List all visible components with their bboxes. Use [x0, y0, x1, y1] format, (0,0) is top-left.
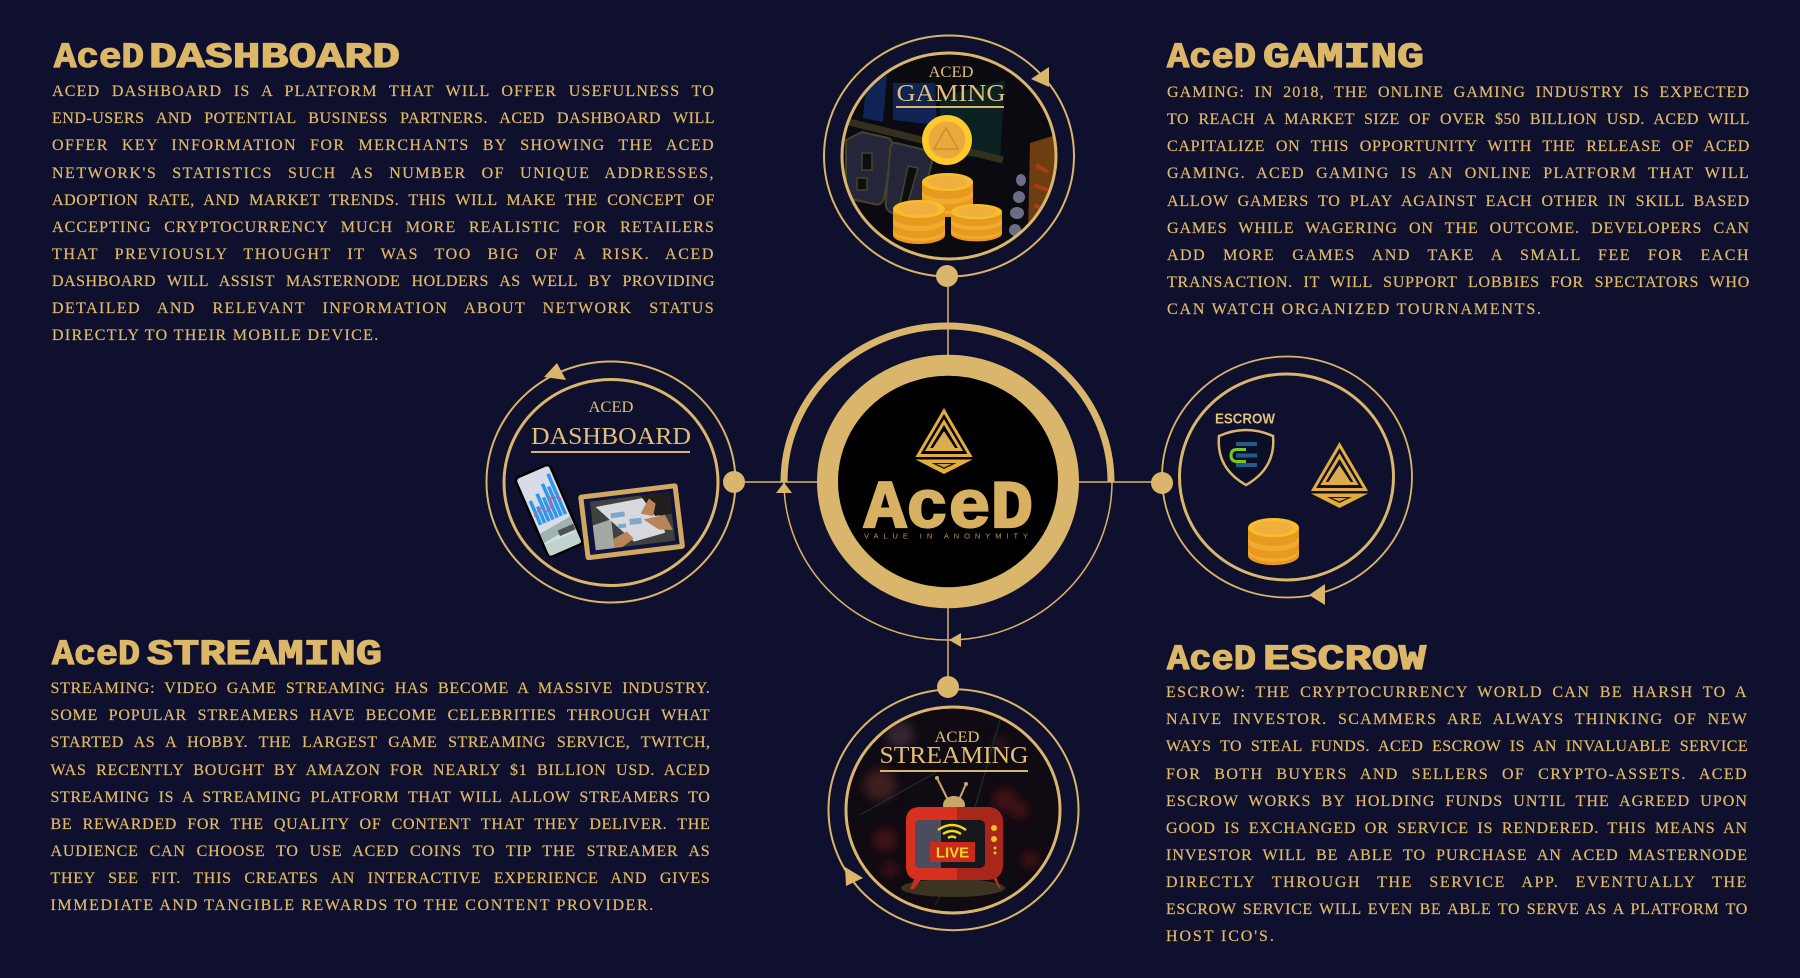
text block: Aced Gaming: ADD MORE GAMES AND TAKE A SMALL FEE FOR EACH [1167, 247, 1750, 264]
title: AceD Streaming heading: STREAMING [147, 635, 382, 675]
title: AceD Gaming heading: GAMING [1263, 38, 1424, 78]
text block: Aced Dashboard: DIRECTLY TO THEIR MOBILE DEVICE. [52, 327, 380, 344]
text block: Aced Gaming: GAMING. ACED GAMING IS AN ONLINE PLATFORM THAT WILL [1167, 165, 1750, 182]
text block: Aced Gaming: GAMING: IN 2018, THE ONLINE GAMING INDUSTRY IS EXPECTED [1167, 84, 1750, 101]
node dot [1151, 472, 1173, 494]
title: AceD Dashboard heading: AceD [54, 38, 144, 78]
text block: Aced Gaming: CAN WATCH ORGANIZED TOURNAMENTS. [1167, 301, 1543, 318]
tagline: VALUE IN ANONYMITY [864, 532, 1028, 540]
text block: Aced Dashboard: NETWORK'S STATISTICS SUCH AS NUMBER OF UNIQUE ADDRESSES, [52, 165, 715, 182]
title: AceD Streaming heading: AceD [52, 635, 140, 675]
thin lower arc [784, 482, 1112, 640]
text block: Aced Dashboard: DETAILED AND RELEVANT INFORMATION ABOUT NETWORK STATUS [52, 300, 715, 317]
text block: Aced Gaming: ALLOW GAMERS TO PLAY AGAINST EACH OTHER IN SKILL BASED [1167, 193, 1750, 210]
text block: Aced Escrow: DIRECTLY THROUGH THE SERVICE APP. EVENTUALLY THE [1166, 874, 1748, 891]
node: Aced Streaming [828, 676, 1078, 930]
node: Aced Dashboard [486, 362, 745, 602]
icon: phone with chart [513, 462, 585, 560]
text block: Aced Gaming: GAMES WHILE WAGERING ON THE OUTCOME. DEVELOPERS CAN [1167, 220, 1750, 237]
icon: coin stack [1248, 518, 1299, 565]
text block: Aced Dashboard: DASHBOARD WILL ASSIST MASTERNODE HOLDERS AS WELL BY PROVIDING [52, 273, 715, 290]
node dot [936, 265, 958, 287]
icon: framed tablet photo [578, 483, 685, 561]
icon: live TV [901, 776, 1005, 897]
text block: Aced Gaming [1167, 84, 1750, 318]
text block: Aced Escrow: NAIVE INVESTOR. SCAMMERS ARE ALWAYS THINKING OF NEW [1166, 711, 1748, 728]
text block: Aced Gaming: TRANSACTION. IT WILL SUPPORT LOBBIES FOR SPECTATORS WHO [1167, 274, 1750, 291]
arrow [1309, 584, 1325, 605]
node: Aced Escrow [1151, 356, 1412, 605]
text block: Aced Gaming: CAPITALIZE ON THIS OPPORTUNITY WITH THE RELEASE OF ACED [1167, 138, 1750, 155]
text block: Aced Dashboard: ACCEPTING CRYPTOCURRENCY MUCH MORE REALISTIC FOR RETAILERS [52, 219, 715, 236]
text block: Aced Dashboard: ADOPTION RATE, AND MARKET TRENDS. THIS WILL MAKE THE CONCEPT OF [52, 192, 715, 209]
text block: Aced Escrow [1166, 684, 1748, 945]
node: Aced Streaming: STREAMING [880, 743, 1028, 769]
node label: ESCROW [1215, 410, 1276, 428]
connector lines [734, 277, 1162, 687]
node dot [723, 471, 745, 493]
title: AceD Gaming heading [1167, 38, 1424, 78]
text block: Aced Escrow: FOR BOTH BUYERS AND SELLERS OF CRYPTO-ASSETS. ACED [1166, 766, 1748, 783]
arrow [1031, 67, 1049, 87]
text block: Aced Escrow: INVESTOR WILL BE ABLE TO PURCHASE AN ACED MASTERNODE [1166, 847, 1748, 864]
arrow: left at bottom [949, 633, 961, 647]
text block: Aced Dashboard: END-USERS AND POTENTIAL BUSINESS PARTNERS. ACED DASHBOARD WILL [52, 110, 715, 127]
central AceD emblem [776, 326, 1112, 647]
text block: Aced Escrow: ESCROW WORKS BY HOLDING FUNDS UNTIL THE AGREED UPON [1166, 793, 1748, 810]
AceD wordmark: AceD [864, 471, 1033, 548]
gold ring with black disc [828, 365, 1068, 598]
text block: Aced Dashboard [52, 83, 715, 344]
node dot [937, 676, 959, 698]
game background image [840, 50, 1060, 262]
text block: Aced Streaming: STREAMING: VIDEO GAME STREAMING HAS BECOME A MASSIVE INDUSTRY. [50, 680, 710, 697]
text block: Aced Streaming: THEY SEE FIT. THIS CREATES AN INTERACTIVE EXPERIENCE AND GIVES [50, 870, 710, 887]
node label: ACED [928, 64, 974, 81]
node: Aced Dashboard: DASHBOARD [531, 424, 691, 450]
text block: Aced Streaming: STARTED AS A HOBBY. THE LARGEST GAME STREAMING SERVICE, TWITCH, [50, 734, 710, 751]
title: AceD Dashboard heading [54, 38, 400, 78]
text block: Aced Dashboard: THAT PREVIOUSLY THOUGHT IT WAS TOO BIG OF A RISK. ACED [52, 246, 715, 263]
node label: ACED [934, 729, 980, 746]
title: AceD Streaming heading [52, 635, 382, 675]
text block: Aced Streaming: BE REWARDED FOR THE QUALITY OF CONTENT THAT THEY DELIVER. THE [50, 816, 710, 833]
text block: Aced Streaming: WAS RECENTLY BOUGHT BY AMAZON FOR NEARLY $1 BILLION USD. ACED [50, 762, 710, 779]
text block: Aced Gaming: TO REACH A MARKET SIZE OF OVER $50 BILLION USD. ACED WILL [1167, 111, 1750, 128]
icon: live TV: LIVE [936, 844, 969, 862]
text block: Aced Streaming: AUDIENCE CAN CHOOSE TO USE ACED COINS TO TIP THE STREAMER AS [50, 843, 710, 860]
node: Aced Gaming: GAMING [896, 81, 1006, 107]
icon: AceD triangle logo [916, 411, 972, 474]
text block: Aced Streaming: STREAMING IS A STREAMING PLATFORM THAT WILL ALLOW STREAMERS TO [50, 789, 710, 806]
text block: Aced Dashboard: OFFER KEY INFORMATION FOR MERCHANTS BY SHOWING THE ACED [52, 137, 715, 154]
icon: coin stacks [893, 173, 1002, 244]
title: AceD Escrow heading: ESCROW [1263, 640, 1426, 680]
text block: Aced Dashboard: ACED DASHBOARD IS A PLATFORM THAT WILL OFFER USEFULNESS TO [52, 83, 715, 100]
node: Aced Gaming [824, 36, 1074, 287]
text block: Aced Escrow: ESCROW SERVICE WILL EVEN BE ABLE TO SERVE AS A PLATFORM TO [1166, 901, 1748, 918]
text block: Aced Streaming: IMMEDIATE AND TANGIBLE REWARDS TO THE CONTENT PROVIDER. [50, 897, 655, 914]
text block: Aced Escrow: WAYS TO STEAL FUNDS. ACED ESCROW IS AN INVALUABLE SERVICE [1166, 738, 1748, 755]
arrow: up on left [776, 482, 792, 493]
thick upper arc [784, 326, 1111, 482]
arrow [544, 363, 566, 380]
icon: AceD triangle logo [1311, 445, 1368, 508]
title: AceD Dashboard heading: DASHBOARD [149, 38, 400, 78]
arrow [845, 867, 863, 886]
text block: Aced Escrow: ESCROW: THE CRYPTOCURRENCY WORLD CAN BE HARSH TO A [1166, 684, 1748, 701]
text block: Aced Escrow: GOOD IS EXCHANGED OR SERVICE IS RENDERED. THIS MEANS AN [1166, 820, 1748, 837]
text block: Aced Streaming: SOME POPULAR STREAMERS HAVE BECOME CELEBRITIES THROUGH WHAT [50, 707, 710, 724]
node label: ACED [588, 399, 634, 416]
text block: Aced Escrow: HOST ICO'S. [1166, 928, 1276, 945]
icon: floating coin [922, 115, 972, 165]
text block: Aced Streaming [50, 680, 710, 914]
title: AceD Escrow heading [1167, 640, 1426, 680]
title: AceD Gaming heading: AceD [1167, 38, 1256, 78]
title: AceD Escrow heading: AceD [1167, 640, 1256, 680]
streaming background image [845, 705, 1065, 917]
icon: shield [1219, 430, 1273, 485]
